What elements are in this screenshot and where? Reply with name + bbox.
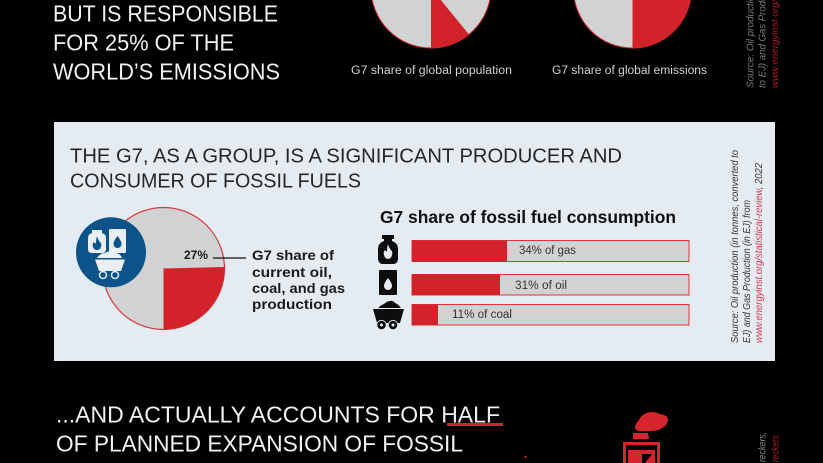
- label: G7 share of global emissions: G7 share of global emissions: [552, 65, 707, 77]
- bar: 34% of gas: 34% of gas: [519, 245, 576, 257]
- label: G7 share of global population: G7 share of global population: [351, 65, 512, 77]
- leader line to production label: [213, 257, 246, 259]
- heading: emissions responsibility: WORLD’S EMISSIONS: [53, 58, 280, 84]
- icon: oil barrel: [379, 270, 397, 295]
- panel heading: THE G7, AS A GROUP, IS A SIGNIFICANT PRODUCER AND: [70, 146, 622, 168]
- pie chart: G7 share of global population: [371, 0, 491, 48]
- heading: planned expansion: ...AND ACTUALLY ACCOUNTS FOR HALF: [56, 401, 500, 427]
- pie chart: 27% share of production: [102, 208, 225, 330]
- label: G7 share of production: current oil,: [252, 265, 332, 280]
- panel heading: CONSUMER OF FOSSIL FUELS: [70, 171, 361, 193]
- icon: coal cart: [373, 301, 404, 330]
- value label: 27%: 27%: [184, 250, 208, 262]
- label: G7 share of production: [252, 248, 345, 312]
- panel heading: [70, 146, 622, 193]
- source note: panel: www.energyinst.org/statistical-review, 2022: [754, 163, 765, 343]
- icon: fossil fuels badge: [76, 217, 146, 287]
- bar: 31% of oil: [412, 274, 689, 295]
- bar: 11% of coal: 11% of coal: [452, 309, 512, 321]
- label: G7 share of production: G7 share of: [252, 248, 335, 263]
- heading: emissions responsibility: BUT IS RESPONSIBLE: [53, 0, 278, 26]
- heading: consumption chart: G7 share of fossil fuel consumption: [380, 207, 676, 227]
- heading: planned expansion: OF PLANNED EXPANSION OF FOSSIL: [56, 430, 463, 456]
- underline: HALF: [447, 423, 503, 426]
- bar: 11% of coal: [412, 304, 689, 325]
- label: G7 share of production: coal, and gas: [252, 281, 345, 296]
- source note: panel: EJ) and Gas Production (in EJ) from: [742, 200, 753, 343]
- bar: 34% of gas: [412, 240, 689, 262]
- heading: emissions responsibility: FOR 25% OF THE: [53, 29, 234, 55]
- source note: bottom section: reckers,: [758, 432, 768, 462]
- heading: planned expansion: [56, 401, 500, 456]
- decorative speck: [524, 456, 526, 458]
- panel: G7 fossil fuel production and consumption: [54, 122, 775, 361]
- icon: red chimney with smoke: [623, 412, 668, 463]
- heading: emissions responsibility: [53, 0, 280, 84]
- source note: panel: [730, 150, 765, 343]
- source note: bottom section: [758, 432, 782, 462]
- pie chart: G7 share of global emissions: [574, 0, 692, 48]
- source note: bottom section: reckers: [770, 435, 782, 462]
- source note: panel: Source: Oil production (in tonnes, converted to: [730, 150, 741, 343]
- bar: 31% of oil: 31% of oil: [515, 280, 567, 292]
- label: G7 share of production: production: [252, 297, 332, 312]
- icon: gas cylinder: [378, 235, 398, 264]
- source note: top section: [746, 0, 781, 88]
